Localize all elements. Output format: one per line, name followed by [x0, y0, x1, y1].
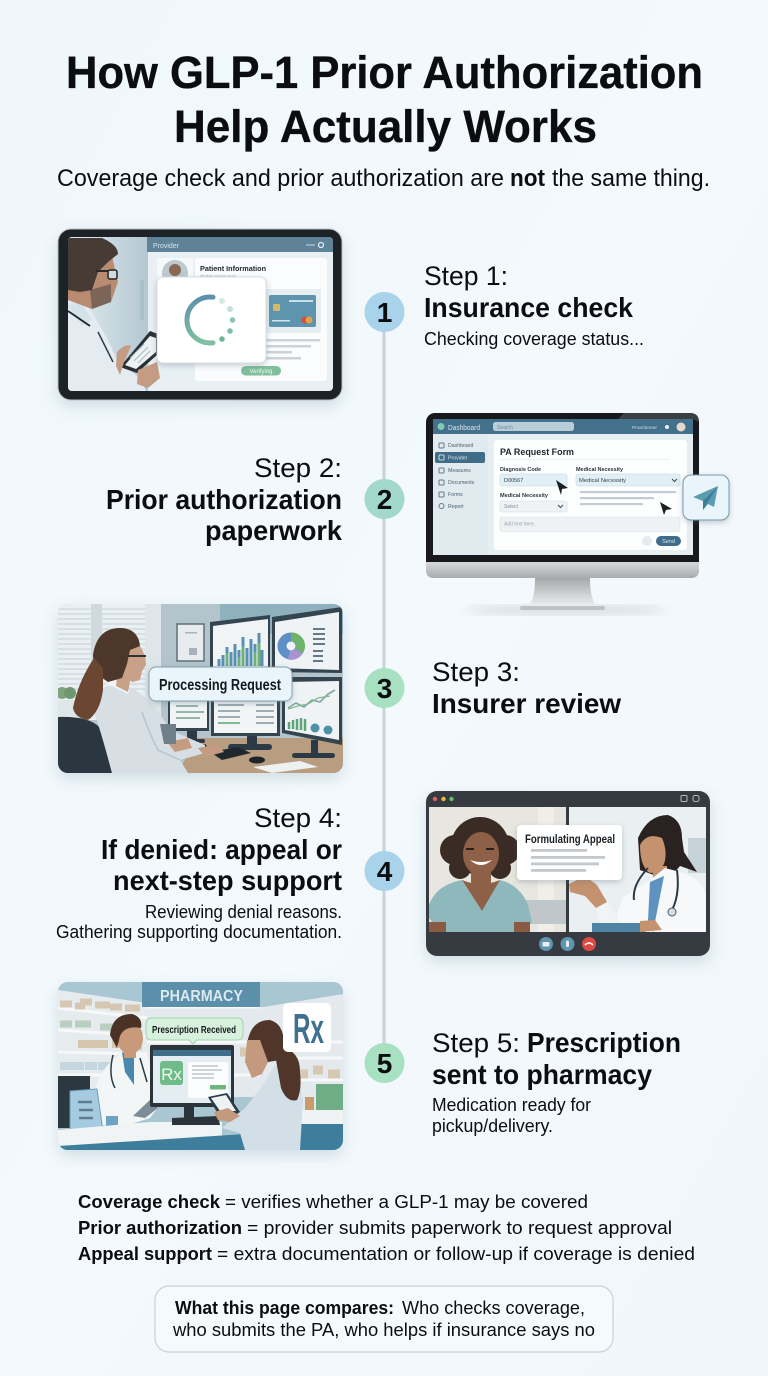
step 5 text: Medication ready for: [432, 1095, 591, 1115]
step 1 text: Insurance check: [424, 292, 633, 323]
PA request form: Select: [504, 504, 519, 510]
PA request form: Medical Necessity: [579, 478, 626, 484]
step 3 badge: [364, 668, 404, 708]
call controls: [539, 937, 596, 951]
callout: what this page compares: Who checks coverage,: [402, 1298, 585, 1318]
step 4 badge: 4: [377, 856, 393, 887]
step 1 text: Checking coverage status...: [424, 329, 644, 349]
formulating appeal card: Formulating Appeal: [525, 834, 615, 846]
step 4 text: next-step support: [113, 865, 342, 896]
subtitle: the same thing.: [552, 165, 710, 192]
desk: [178, 738, 343, 773]
counter display: [70, 1089, 118, 1133]
PA request form: Diagnosis Code: [500, 467, 542, 473]
PA request form: PA Request Form: [500, 447, 574, 458]
definitions: Prior authorization: [78, 1218, 242, 1238]
monitor stand: [528, 578, 597, 606]
step 1 text: Step 1:: [424, 261, 508, 291]
step 1 badge: 1: [377, 297, 392, 328]
office illustration: insurer review: [56, 604, 343, 773]
dashboard sidebar: Documents: [448, 480, 475, 486]
woman at desk: [73, 628, 224, 773]
patient information panel: [195, 258, 327, 381]
paper plane icon: [683, 475, 729, 520]
patient information panel: Checking coverage status: [200, 274, 237, 279]
window blinds: [56, 604, 161, 720]
step 2 badge: [364, 479, 404, 519]
donut chart monitor: [272, 607, 342, 673]
step 4 text: Gathering supporting documentation.: [56, 922, 342, 942]
cursor: [556, 480, 568, 495]
pharmacy sign: [142, 982, 260, 1007]
dashboard header: [433, 419, 693, 434]
definitions: [78, 1192, 695, 1264]
step 2 text: Prior authorization: [106, 484, 342, 515]
PA request form: Medical Necessity: [576, 467, 624, 473]
shelves: [58, 990, 343, 1110]
window controls: [433, 796, 699, 802]
PA request form: Add text here...: [504, 522, 538, 528]
PA request form: [494, 440, 687, 550]
prescription received bubble: [146, 1018, 243, 1044]
processing request label: [149, 667, 292, 701]
PA request form: D00567: [504, 478, 523, 484]
callout: what this page compares: What this page compares:: [175, 1298, 394, 1318]
step 5 text: pickup/delivery.: [432, 1116, 553, 1136]
tablet illustration: insurance check: Provider: [153, 241, 179, 250]
definitions: Appeal support: [78, 1244, 212, 1264]
loading spinner card: [157, 277, 266, 363]
formulating appeal card: [517, 825, 622, 880]
step 4 text: If denied: appeal or: [101, 834, 342, 865]
line chart monitor: [282, 677, 342, 758]
pharmacy illustration: [58, 982, 343, 1150]
doctor video pane: [569, 807, 706, 932]
step 1 text: [424, 261, 644, 349]
dashboard sidebar: Measures: [448, 468, 471, 474]
bar chart monitor: [210, 615, 270, 666]
title: [66, 47, 703, 152]
framed certificate: [177, 624, 204, 661]
definitions: = provider submits paperwork to request approval: [247, 1218, 672, 1238]
step 5 text: Prescription: [527, 1027, 681, 1058]
step 2 text: [106, 453, 342, 546]
tablet illustration: insurance check: [58, 229, 342, 400]
dark equipment: [58, 1076, 90, 1128]
step 5 badge: [364, 1043, 404, 1083]
dashboard sidebar: Forms: [448, 492, 463, 498]
step 4 text: [56, 803, 342, 942]
counter: [58, 1110, 343, 1150]
doctor figure: [68, 238, 160, 391]
callout: what this page compares: who submits the PA, who helps if insurance says no: [172, 1320, 595, 1340]
definitions: Coverage check: [78, 1192, 221, 1212]
title: How GLP-1 Prior Authorization: [66, 47, 703, 98]
step 4 text: Reviewing denial reasons.: [145, 902, 342, 922]
computer monitor: Rx: [161, 1065, 182, 1084]
pharmacy sign: PHARMACY: [160, 988, 244, 1005]
processing request label: Processing Request: [159, 677, 281, 694]
step 3 badge: 3: [377, 673, 392, 704]
avatar card: [157, 258, 193, 280]
subtitle: not: [510, 165, 545, 192]
step 5 badge: 5: [377, 1048, 392, 1079]
patient information panel: Patient Information: [200, 264, 266, 273]
dashboard header: Search: [497, 425, 513, 431]
computer monitor: [150, 1045, 234, 1125]
step 3 text: Insurer review: [432, 688, 621, 719]
dashboard sidebar: Dashboard: [448, 443, 473, 449]
step 4 text: Step 4:: [254, 803, 342, 833]
dashboard sidebar: [433, 434, 488, 555]
Rx badge: Rx: [293, 1005, 324, 1052]
dashboard header: Dashboard: [448, 425, 480, 432]
keyboard and mouse: [203, 744, 318, 773]
dashboard header: Practitioner: [632, 425, 658, 430]
chair: [58, 717, 112, 773]
prescription received bubble: Prescription Received: [152, 1025, 236, 1036]
table monitor: [211, 700, 280, 750]
step 5 text: Step 5:: [432, 1028, 520, 1058]
patient video pane: [429, 807, 566, 932]
step 2 text: paperwork: [205, 515, 342, 546]
video call illustration: appeal support: [426, 791, 710, 956]
cursor: [660, 502, 672, 515]
pharmacist: [91, 1014, 160, 1126]
dashboard sidebar: Provider: [448, 456, 468, 462]
dashboard sidebar: Report: [448, 504, 464, 510]
step 5 text: sent to pharmacy: [432, 1059, 652, 1090]
callout: what this page compares: [155, 1286, 613, 1352]
definitions: = extra documentation or follow-up if coverage is denied: [217, 1244, 695, 1264]
PA request form: Medical Necessity: [500, 493, 549, 499]
step 2 text: Step 2:: [254, 453, 342, 483]
notes monitor: [168, 700, 209, 743]
patient information panel: Verifying: [249, 369, 273, 375]
Rx badge: [283, 1003, 331, 1052]
step 5 text: [432, 1027, 681, 1136]
step 1 badge: [364, 292, 404, 332]
step 4 badge: [364, 851, 404, 891]
timeline connector: [382, 312, 386, 1063]
customer: [208, 1020, 303, 1150]
subtitle: Coverage check and prior authorization are: [57, 165, 504, 192]
definitions: = verifies whether a GLP-1 may be covered: [225, 1192, 588, 1212]
PA request form: Send: [662, 539, 675, 545]
step 2 badge: 2: [377, 484, 392, 515]
desktop monitor illustration: PA request form: [426, 413, 729, 615]
step 3 text: [432, 657, 621, 719]
title: Help Actually Works: [174, 101, 597, 152]
step 3 text: Step 3:: [432, 657, 520, 687]
